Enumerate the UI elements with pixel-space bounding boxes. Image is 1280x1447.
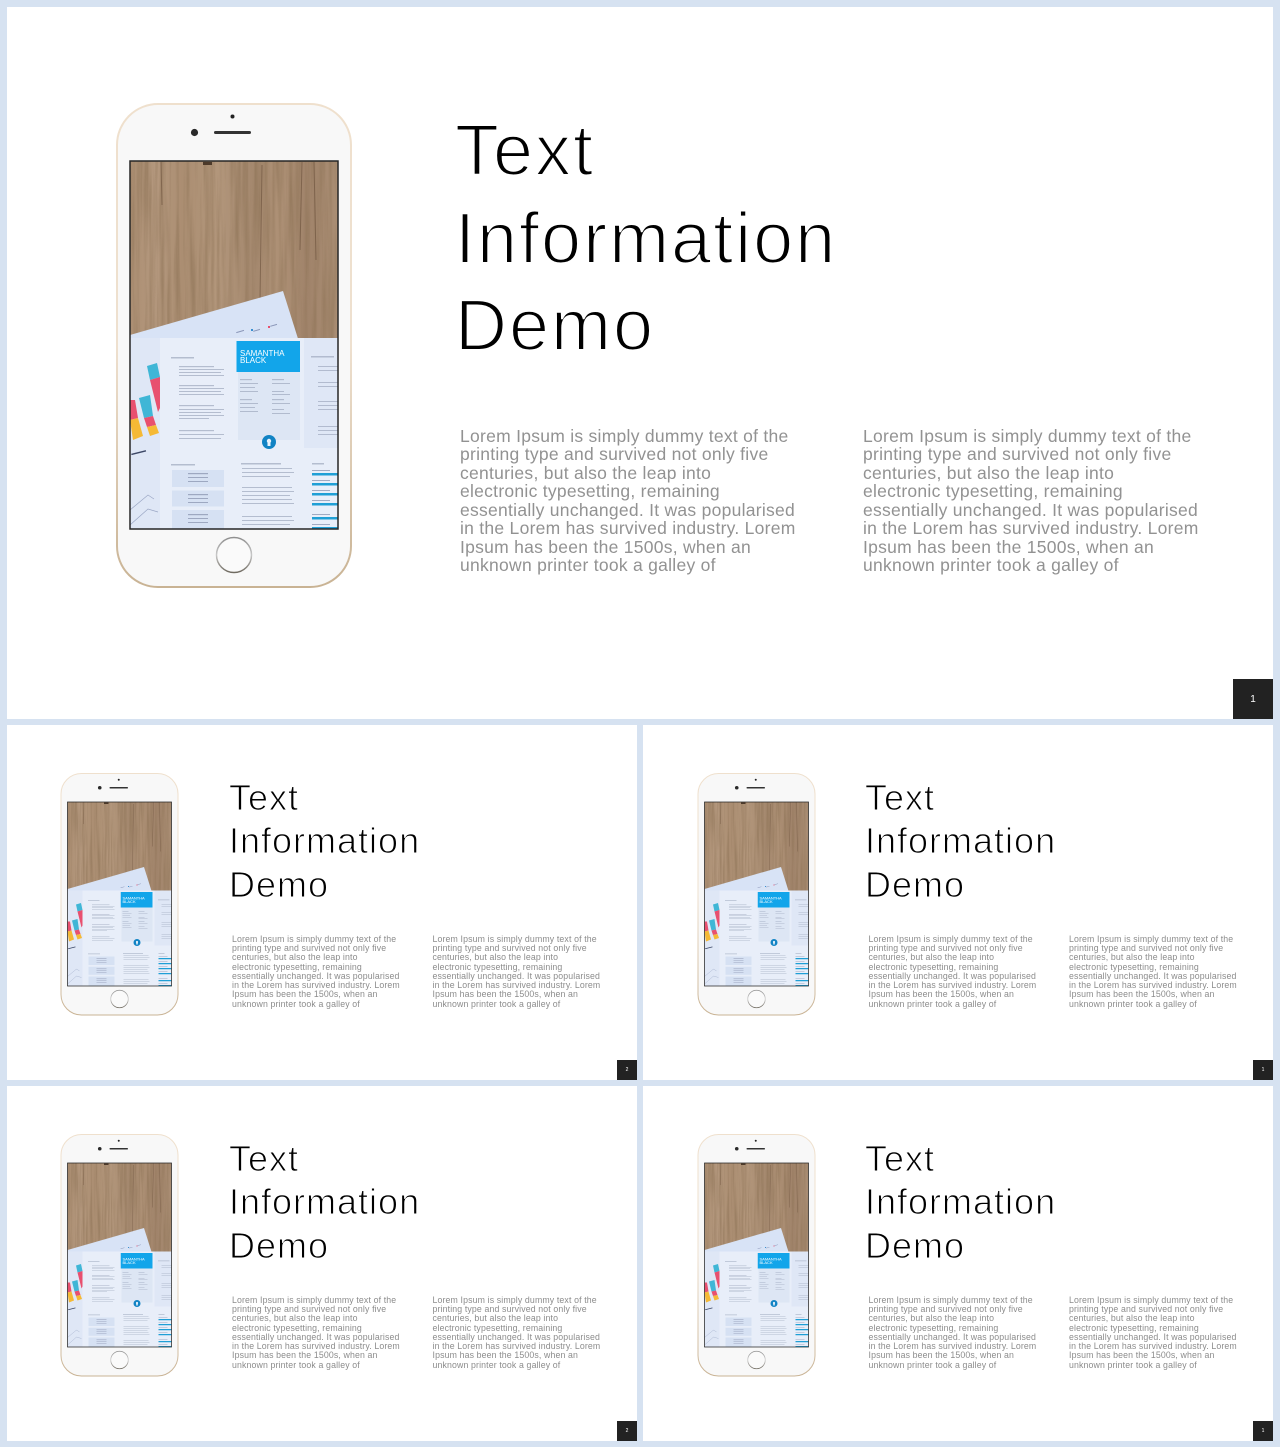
text block: right column: Lorem Ipsum is simply dummy text of the xyxy=(432,934,597,944)
title xyxy=(865,776,1056,904)
text block: left column: Lorem Ipsum is simply dummy text of the xyxy=(868,934,1033,944)
text block: left column: essentially unchanged. It was popularised xyxy=(232,971,400,981)
text block: left column: in the Lorem has survived industry. Lorem xyxy=(232,1341,400,1351)
icon: smartphone with resume on screen: BLACK xyxy=(240,356,267,365)
page number xyxy=(617,1421,637,1441)
icon: smartphone xyxy=(698,773,816,1016)
text block: left column: unknown printer took a galley of xyxy=(232,999,360,1009)
panel: main slide xyxy=(7,7,1273,719)
title xyxy=(229,776,420,904)
panel: slide thumbnail bottom left xyxy=(7,1086,637,1441)
title: Demo xyxy=(229,864,329,904)
text block: left column: Lorem Ipsum is simply dummy text of the xyxy=(232,1295,396,1305)
text block: right column: unknown printer took a galley of xyxy=(432,1360,560,1370)
text block: left column: unknown printer took a galley of xyxy=(868,1360,996,1370)
text block: right column: essentially unchanged. It was popularised xyxy=(432,971,600,981)
text block: left column: Ipsum has been the 1500s, when an xyxy=(868,1350,1014,1360)
text block: left column: centuries, but also the leap into xyxy=(868,1313,994,1323)
title: Demo xyxy=(455,286,655,366)
text block: right column: Lorem Ipsum is simply dummy text of the xyxy=(1069,934,1233,944)
icon: smartphone: BLACK xyxy=(760,899,773,904)
text block: right column xyxy=(432,934,600,1009)
icon: smartphone: BLACK xyxy=(123,899,136,904)
text block: right column: essentially unchanged. It was popularised xyxy=(1069,1332,1237,1342)
text block: left column: centuries, but also the leap into xyxy=(232,1313,358,1323)
text block: right column: electronic typesetting, remaining xyxy=(432,962,562,972)
icon: smartphone xyxy=(60,1134,178,1376)
text block: left column: Lorem Ipsum is simply dummy text of the xyxy=(868,1295,1033,1305)
text block: left column: Lorem Ipsum is simply dummy text of the xyxy=(460,426,789,446)
text block: right column: Ipsum has been the 1500s, when an xyxy=(1069,1350,1215,1360)
text block: left column: Lorem Ipsum is simply dummy text of the xyxy=(232,934,396,944)
text block: right column: unknown printer took a galley of xyxy=(1069,1360,1197,1370)
text block: right column: printing type and survived not only five xyxy=(1069,943,1223,953)
panel: slide thumbnail bottom right xyxy=(643,1086,1273,1441)
icon: smartphone: BLACK xyxy=(760,1260,773,1265)
text block: right column: in the Lorem has survived industry. Lorem xyxy=(432,980,600,990)
text block: left column xyxy=(868,934,1036,1009)
text block: left column: Ipsum has been the 1500s, when an xyxy=(868,989,1014,999)
text block: left column: in the Lorem has survived industry. Lorem xyxy=(868,1341,1036,1351)
text block: right column: electronic typesetting, remaining xyxy=(863,481,1123,501)
title: Text xyxy=(229,776,299,818)
panel: slide thumbnail top left xyxy=(7,725,637,1080)
text block: right column xyxy=(1069,934,1237,1009)
title: Information xyxy=(229,820,420,861)
icon: smartphone: BLACK xyxy=(123,1260,136,1265)
text block: right column: centuries, but also the leap into xyxy=(432,952,558,962)
text block: left column: electronic typesetting, remaining xyxy=(232,962,362,972)
page number xyxy=(1233,679,1273,719)
text block: left column: centuries, but also the leap into xyxy=(460,463,711,483)
text block: left column: printing type and survived not only five xyxy=(868,1304,1023,1314)
text block: left column xyxy=(232,934,400,1009)
icon: smartphone xyxy=(60,773,178,1016)
text block: left column: unknown printer took a galley of xyxy=(868,999,996,1009)
title: Text xyxy=(455,111,595,191)
text block: right column: Lorem Ipsum is simply dummy text of the xyxy=(863,426,1192,446)
text block: left column: in the Lorem has survived industry. Lorem xyxy=(868,980,1036,990)
text block: left column: essentially unchanged. It was popularised xyxy=(868,971,1036,981)
text block: left column: in the Lorem has survived industry. Lorem xyxy=(232,980,400,990)
text block: right column: unknown printer took a galley of xyxy=(863,555,1119,575)
text block: left column: Ipsum has been the 1500s, when an xyxy=(232,989,378,999)
text block: right column: in the Lorem has survived industry. Lorem xyxy=(1069,1341,1237,1351)
text block: right column: centuries, but also the leap into xyxy=(1069,952,1195,962)
title: Demo xyxy=(229,1224,329,1266)
icon: smartphone: SAMANTHA xyxy=(123,895,145,900)
text block: left column xyxy=(460,426,796,575)
text block: right column xyxy=(1069,1295,1237,1370)
title: Information xyxy=(865,1181,1056,1222)
text block: right column: Ipsum has been the 1500s, when an xyxy=(432,1350,578,1360)
text block: right column: in the Lorem has survived industry. Lorem xyxy=(432,1341,600,1351)
title: Text xyxy=(229,1138,299,1178)
text block: right column: centuries, but also the leap into xyxy=(863,463,1114,483)
title: Information xyxy=(455,199,837,279)
text block: right column: essentially unchanged. It was popularised xyxy=(432,1332,600,1342)
text block: right column: electronic typesetting, remaining xyxy=(1069,962,1199,972)
icon: smartphone with resume on screen xyxy=(116,103,352,588)
page number: 2 xyxy=(626,1067,628,1073)
text block: right column: essentially unchanged. It was popularised xyxy=(1069,971,1237,981)
icon: smartphone with resume on screen: SAMANTHA xyxy=(240,349,285,358)
page number xyxy=(617,1060,637,1080)
text block: right column xyxy=(432,1295,600,1370)
page number: 1 xyxy=(1250,694,1256,705)
text block: right column: electronic typesetting, remaining xyxy=(432,1323,562,1333)
text block: right column: printing type and survived not only five xyxy=(863,444,1171,464)
icon: smartphone xyxy=(698,1134,816,1376)
text block: left column: printing type and survived not only five xyxy=(868,943,1023,953)
text block: right column: Lorem Ipsum is simply dummy text of the xyxy=(432,1295,597,1305)
page number xyxy=(1253,1060,1273,1080)
title xyxy=(229,1138,420,1266)
text block: left column: unknown printer took a galley of xyxy=(232,1360,360,1370)
text block: right column: Ipsum has been the 1500s, when an xyxy=(432,989,578,999)
text block: left column: printing type and survived not only five xyxy=(232,943,386,953)
text block: left column: essentially unchanged. It was popularised xyxy=(460,500,795,520)
text block: right column: Ipsum has been the 1500s, when an xyxy=(1069,989,1215,999)
title: Information xyxy=(865,820,1056,861)
text block: left column: electronic typesetting, remaining xyxy=(868,962,998,972)
icon: smartphone: SAMANTHA xyxy=(760,1256,782,1261)
text block: right column: unknown printer took a galley of xyxy=(432,999,560,1009)
title: Information xyxy=(229,1181,420,1222)
text block: right column: electronic typesetting, remaining xyxy=(1069,1323,1199,1333)
text block: left column: unknown printer took a galley of xyxy=(460,555,716,575)
text block: right column: printing type and survived not only five xyxy=(432,1304,587,1314)
icon: smartphone: SAMANTHA xyxy=(123,1256,145,1261)
text block: right column: in the Lorem has survived industry. Lorem xyxy=(1069,980,1237,990)
page number: 2 xyxy=(626,1428,628,1434)
text block: left column: essentially unchanged. It was popularised xyxy=(232,1332,400,1342)
text block: right column: Ipsum has been the 1500s, when an xyxy=(863,537,1154,557)
text block: right column: Lorem Ipsum is simply dummy text of the xyxy=(1069,1295,1233,1305)
text block: right column: printing type and survived not only five xyxy=(1069,1304,1223,1314)
text block: right column: printing type and survived not only five xyxy=(432,943,587,953)
text block: left column: essentially unchanged. It was popularised xyxy=(868,1332,1036,1342)
text block: left column: centuries, but also the leap into xyxy=(868,952,994,962)
page number xyxy=(1253,1421,1273,1441)
text block: left column xyxy=(868,1295,1036,1370)
text block: left column: electronic typesetting, remaining xyxy=(868,1323,998,1333)
page number: 1 xyxy=(1262,1067,1264,1073)
text block: left column: electronic typesetting, remaining xyxy=(232,1323,362,1333)
text block: right column: centuries, but also the leap into xyxy=(432,1313,558,1323)
text block: left column xyxy=(232,1295,400,1370)
text block: right column: in the Lorem has survived industry. Lorem xyxy=(863,518,1199,538)
text block: left column: in the Lorem has survived industry. Lorem xyxy=(460,518,796,538)
text block: left column: Ipsum has been the 1500s, when an xyxy=(460,537,751,557)
text block: right column: unknown printer took a galley of xyxy=(1069,999,1197,1009)
title xyxy=(865,1138,1056,1266)
panel: slide thumbnail top right xyxy=(643,725,1273,1080)
text block: left column: centuries, but also the leap into xyxy=(232,952,358,962)
text block: left column: printing type and survived not only five xyxy=(460,444,768,464)
title: Text xyxy=(865,1138,935,1178)
title: Demo xyxy=(865,1224,965,1266)
text block: right column xyxy=(863,426,1199,575)
title: Demo xyxy=(865,864,965,904)
title xyxy=(455,111,837,366)
text block: right column: centuries, but also the leap into xyxy=(1069,1313,1195,1323)
icon: smartphone: SAMANTHA xyxy=(760,895,782,900)
page number: 1 xyxy=(1262,1428,1264,1434)
text block: right column: essentially unchanged. It was popularised xyxy=(863,500,1198,520)
text block: left column: printing type and survived not only five xyxy=(232,1304,386,1314)
text block: left column: Ipsum has been the 1500s, when an xyxy=(232,1350,378,1360)
text block: left column: electronic typesetting, remaining xyxy=(460,481,720,501)
title: Text xyxy=(865,776,935,818)
